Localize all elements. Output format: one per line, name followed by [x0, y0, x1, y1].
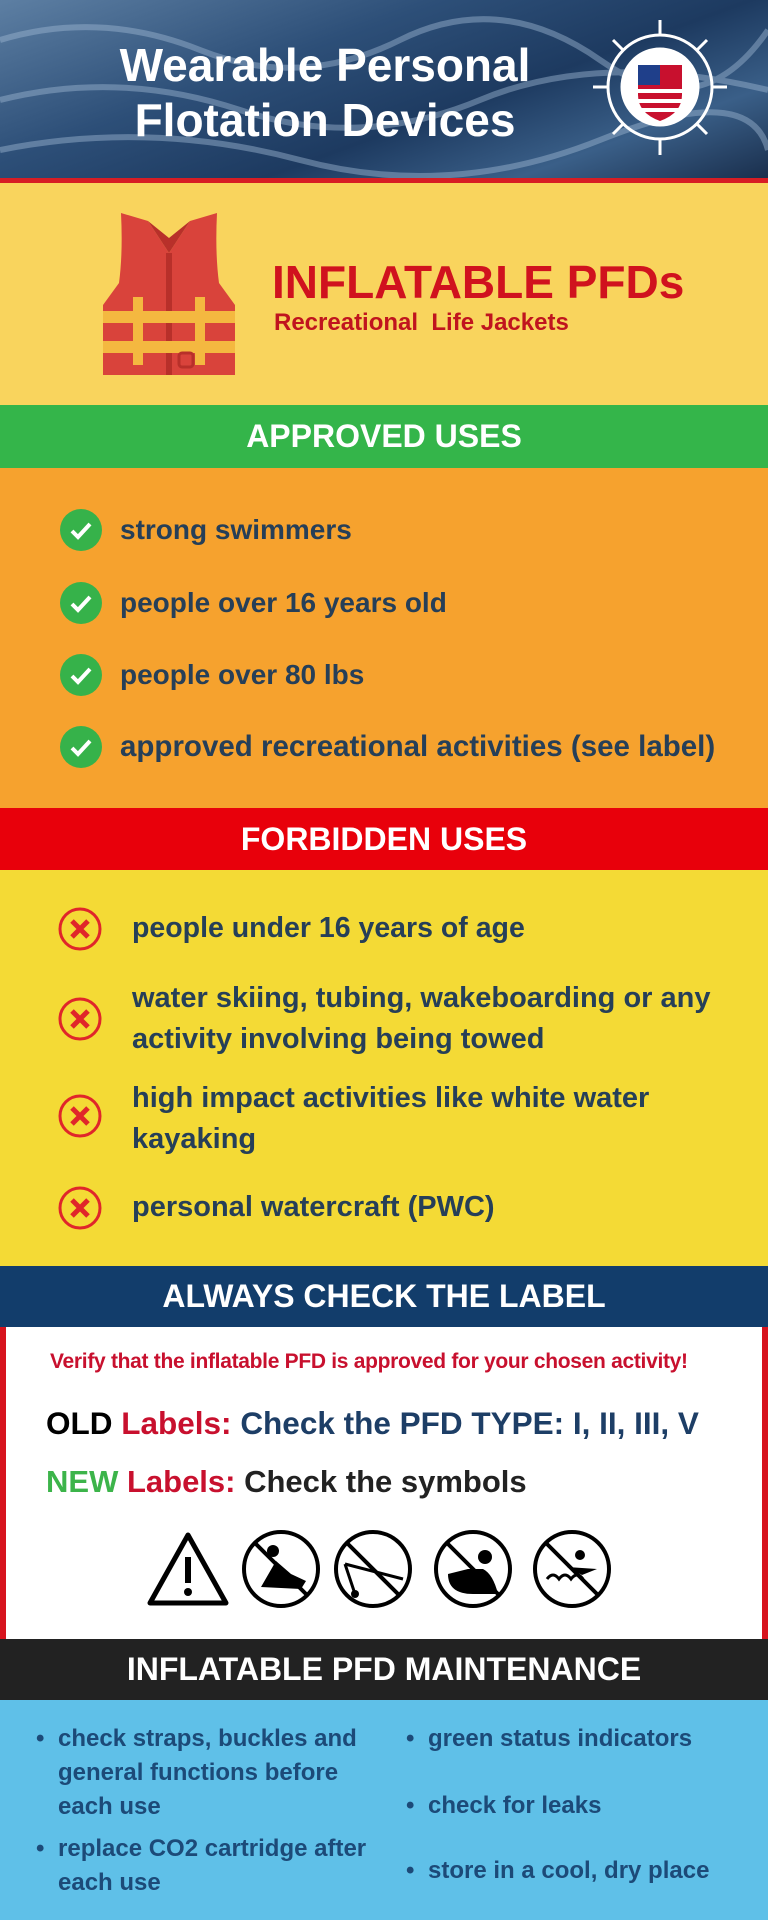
- list: right column: green status indicators: [428, 1725, 692, 1752]
- item: high impact: [58, 1082, 649, 1155]
- list: left column: each use: [58, 1869, 161, 1896]
- panel: approved uses: [0, 468, 768, 808]
- subheading: Recreational Life Jackets: [274, 309, 569, 336]
- item: towed activities: activity involving being towed: [132, 1023, 544, 1055]
- icons: label symbols: [148, 1530, 611, 1608]
- item: towed activities: water skiing, tubing, wakeboarding or any: [132, 982, 710, 1014]
- item: over 80 lbs: [60, 654, 364, 696]
- text: old labels: OLD Labels: Check the PFD TYPE: I, II, III, V: [46, 1405, 699, 1441]
- item: PWC: personal watercraft (PWC): [132, 1191, 495, 1223]
- list: right column: check for leaks: [428, 1792, 601, 1819]
- header: ocean background: [0, 0, 768, 178]
- heading: always check the label: [0, 1266, 768, 1327]
- item: towed activities: [58, 982, 710, 1055]
- heading: forbidden uses: FORBIDDEN USES: [241, 821, 527, 857]
- title: Flotation Devices: [135, 94, 515, 146]
- list: left column: general functions before: [58, 1759, 338, 1786]
- heading: forbidden uses: [0, 808, 768, 870]
- logo: Drive a Boat USA: [593, 20, 727, 155]
- heading: approved uses: APPROVED USES: [246, 418, 522, 454]
- heading: maintenance: INFLATABLE PFD MAINTENANCE: [127, 1651, 641, 1687]
- list: left column: replace CO2 cartridge after: [58, 1835, 366, 1862]
- item: PWC: [58, 1186, 495, 1230]
- heading: approved uses: [0, 405, 768, 468]
- list: left column: each use: [58, 1793, 161, 1820]
- heading: INFLATABLE PFDs: INFLATABLE PFDs: [272, 256, 684, 308]
- list: right column: [406, 1725, 709, 1884]
- title: [120, 39, 530, 146]
- list: left column: [36, 1725, 366, 1896]
- item: under 16: people under 16 years of age: [132, 912, 525, 944]
- panel: label check: [0, 1327, 768, 1639]
- list: left column: check straps, buckles and: [58, 1725, 357, 1752]
- icon: life vest: [103, 213, 235, 375]
- panel: maintenance: [0, 1700, 768, 1920]
- text: new labels: NEW Labels: Check the symbols: [46, 1464, 527, 1499]
- panel: forbidden uses: [0, 870, 768, 1266]
- item: over 16: people over 16 years old: [120, 587, 447, 618]
- text: verify: Verify that the inflatable PFD is approved for your chosen activity!: [50, 1350, 688, 1373]
- panel: title banner: [0, 183, 768, 405]
- item: approved activities: approved recreational activities (see label): [120, 730, 715, 763]
- item: strong swimmers: [60, 509, 352, 551]
- title: Wearable Personal: [120, 39, 530, 91]
- item: high impact: high impact activities like white water: [132, 1082, 649, 1114]
- list: right column: store in a cool, dry place: [428, 1857, 709, 1884]
- item: over 80 lbs: people over 80 lbs: [120, 659, 364, 690]
- item: over 16: [60, 582, 447, 624]
- item: strong swimmers: strong swimmers: [120, 514, 352, 545]
- heading: maintenance: [0, 1639, 768, 1700]
- item: under 16: [58, 908, 525, 950]
- heading: always check the label: ALWAYS CHECK THE LABEL: [162, 1278, 606, 1314]
- item: high impact: kayaking: [132, 1123, 256, 1155]
